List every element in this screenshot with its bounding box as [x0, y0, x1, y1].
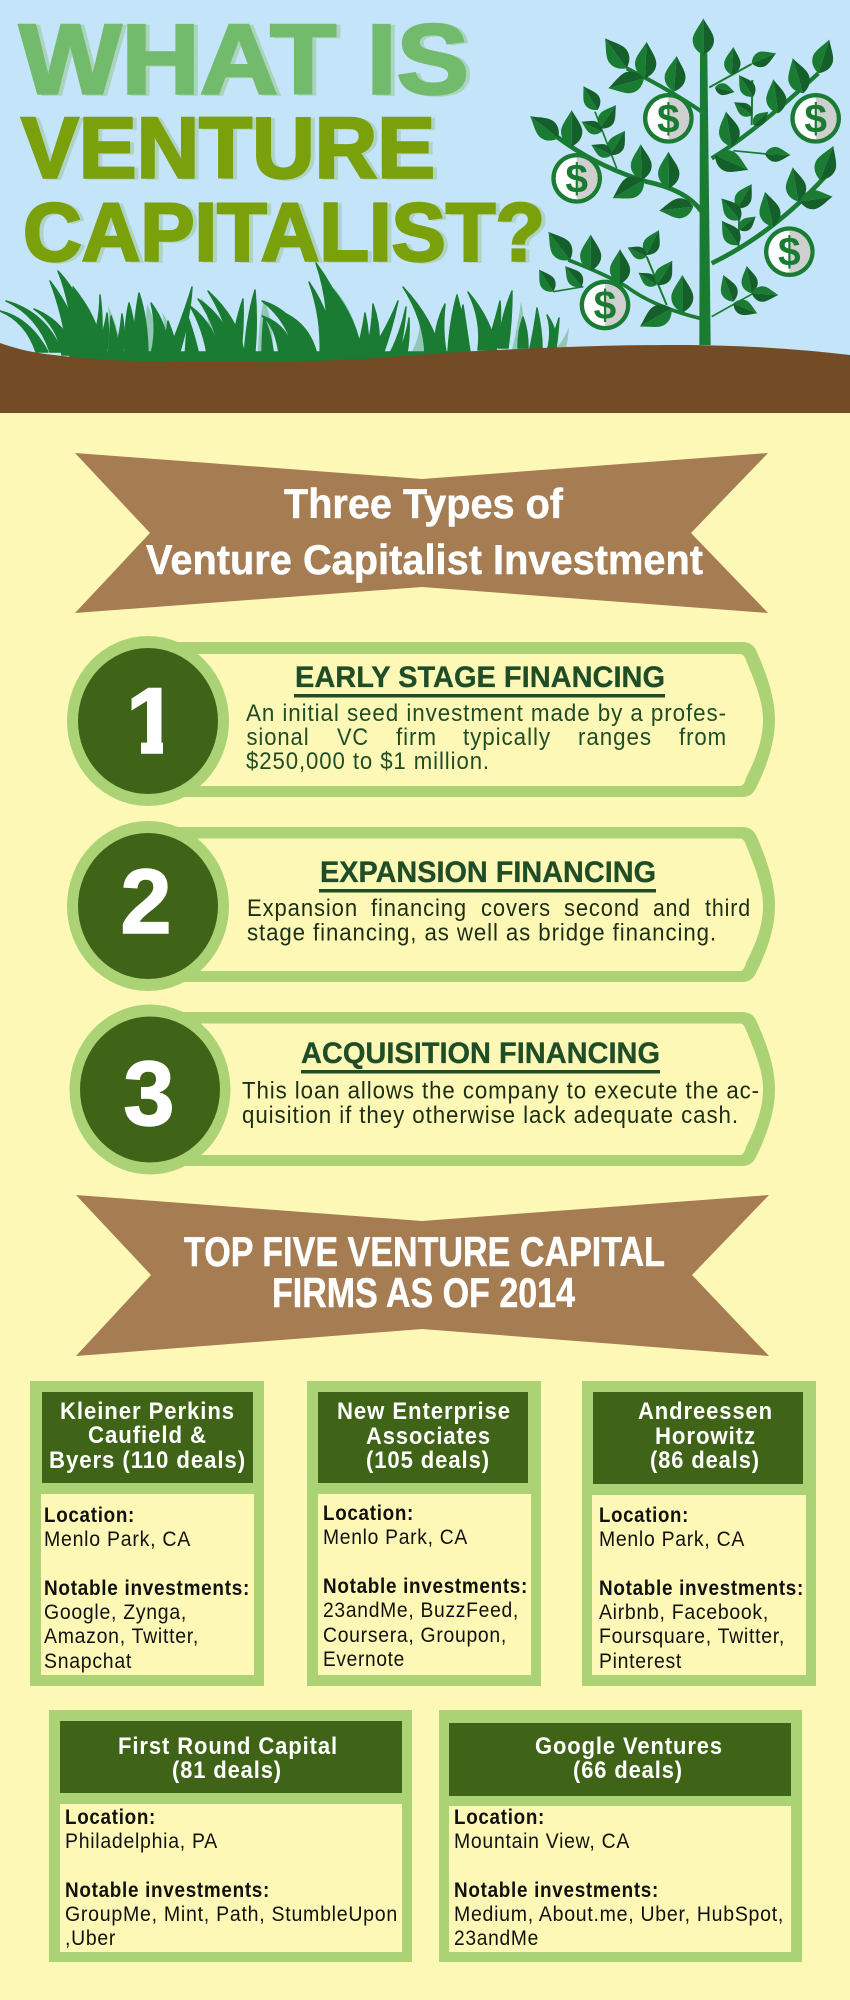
panel: early stage financing: sional — [246, 724, 310, 751]
panel: Kleiner Perkins: Caufield & — [88, 1422, 207, 1449]
panel: expansion financing: 2 — [120, 851, 172, 953]
banner: three types: Venture Capitalist Investment — [146, 536, 703, 583]
panel: Google Ventures: Mountain View, CA — [454, 1829, 630, 1853]
coin 4: $ — [778, 229, 801, 275]
panel: Google Ventures: Google Ventures — [535, 1733, 723, 1760]
panel: First Round Capital: ,Uber — [65, 1926, 116, 1950]
panel: New Enterprise Associates: New Enterprise — [337, 1398, 511, 1425]
panel: early stage financing: ranges — [578, 724, 652, 751]
panel: New Enterprise Associates: Associates — [366, 1423, 491, 1450]
panel: Kleiner Perkins: Google, Zynga, — [44, 1600, 187, 1624]
coin 1 — [643, 93, 694, 144]
panel: expansion financing: covers — [481, 895, 551, 922]
panel: early stage financing: 1 — [126, 668, 178, 773]
panel: First Round Capital: First Round Capital — [118, 1733, 338, 1760]
title: What Is Venture Capitalist?: CAPITALIST? — [27, 186, 549, 280]
panel: First Round Capital: (81 deals) — [172, 1757, 282, 1784]
panel: Kleiner Perkins: Notable investments: — [44, 1576, 250, 1600]
panel: New Enterprise Associates: Evernote — [323, 1647, 405, 1671]
panel: Google Ventures: (66 deals) — [573, 1757, 683, 1784]
banner: top five firms — [76, 1195, 769, 1356]
panel: expansion financing: Expansion — [247, 895, 358, 922]
panel: Andreessen Horowitz — [582, 1381, 816, 1686]
panel: First Round Capital — [49, 1710, 412, 1962]
panel: Kleiner Perkins: Kleiner Perkins — [60, 1398, 235, 1425]
panel: early stage financing: typically — [463, 724, 551, 751]
panel: Andreessen Horowitz: Horowitz — [655, 1423, 756, 1450]
panel: Andreessen Horowitz: Andreessen — [638, 1398, 773, 1425]
panel: Kleiner Perkins: Snapchat — [44, 1649, 132, 1673]
panel: Andreessen Horowitz: Airbnb, Facebook, — [599, 1600, 769, 1624]
panel: acquisition financing: This loan allows the company to execute the ac- — [242, 1078, 760, 1104]
panel: expansion financing: third — [705, 895, 751, 922]
coin 5 — [580, 280, 630, 330]
panel: expansion financing — [67, 821, 775, 991]
panel: Google Ventures: Location: — [454, 1805, 545, 1829]
panel: expansion financing: EXPANSION FINANCING — [320, 856, 656, 889]
panel: Kleiner Perkins: Byers (110 deals) — [49, 1447, 246, 1474]
grass — [0, 263, 569, 364]
panel: First Round Capital: Philadelphia, PA — [65, 1829, 218, 1853]
header scene: sky — [0, 0, 850, 413]
panel: expansion financing: second — [564, 895, 640, 922]
panel: Kleiner Perkins: Location: — [44, 1503, 135, 1527]
title: What Is Venture Capitalist?: VENTURE — [21, 100, 435, 196]
panel: Andreessen Horowitz: (86 deals) — [650, 1447, 760, 1474]
panel: Google Ventures: Medium, About.me, Uber, HubSpot, — [454, 1902, 784, 1926]
panel: New Enterprise Associates: Menlo Park, CA — [323, 1525, 468, 1549]
panel: Google Ventures: 23andMe — [454, 1926, 539, 1950]
coin 4 — [764, 226, 815, 277]
panel: Google Ventures: Notable investments: — [454, 1878, 659, 1902]
panel: acquisition financing: ACQUISITION FINANCING — [301, 1037, 660, 1070]
panel: New Enterprise Associates: Coursera, Groupon, — [323, 1623, 507, 1647]
panel: New Enterprise Associates: 23andMe, BuzzFeed, — [323, 1598, 519, 1622]
panel: First Round Capital: Location: — [65, 1805, 156, 1829]
panel: early stage financing: VC — [337, 724, 369, 751]
ground — [0, 343, 850, 413]
panel: New Enterprise Associates — [307, 1381, 541, 1686]
panel: Kleiner Perkins — [30, 1381, 264, 1686]
tree leaves — [524, 18, 843, 336]
panel: Andreessen Horowitz: Foursquare, Twitter, — [599, 1624, 785, 1648]
panel: New Enterprise Associates: (105 deals) — [366, 1447, 490, 1474]
panel: early stage financing: An initial seed investment made by a profes- — [246, 700, 727, 727]
tree trunk and branches — [553, 53, 825, 345]
panel: early stage financing: $250,000 to $1 million. — [246, 748, 490, 775]
panel: Andreessen Horowitz: Notable investments: — [599, 1576, 804, 1600]
panel: early stage financing: EARLY STAGE FINANCING — [295, 661, 665, 694]
panel: expansion financing: and — [653, 895, 691, 922]
banner: three types: Three Types of — [284, 480, 564, 527]
panel: acquisition financing: 3 — [123, 1043, 175, 1145]
panel: early stage financing: firm — [396, 724, 437, 751]
panel: Andreessen Horowitz: Location: — [599, 1503, 689, 1527]
coin 2: $ — [565, 155, 588, 201]
title: What Is Venture Capitalist? — [19, 4, 549, 280]
panel: acquisition financing: quisition if they otherwise lack adequate cash. — [242, 1102, 739, 1129]
panel: First Round Capital: GroupMe, Mint, Path, StumbleUpon — [65, 1902, 398, 1926]
banner: three types — [75, 453, 768, 613]
coin 3 — [790, 93, 841, 144]
title: What Is Venture Capitalist?: WHAT IS — [19, 4, 469, 114]
banner: top five firms: TOP FIVE VENTURE CAPITAL — [184, 1228, 665, 1275]
panel: Google Ventures — [439, 1710, 802, 1962]
panel: Andreessen Horowitz: Menlo Park, CA — [599, 1527, 745, 1551]
panel: New Enterprise Associates: Location: — [323, 1501, 414, 1525]
panel: First Round Capital: Notable investments: — [65, 1878, 270, 1902]
panel: early stage financing: from — [679, 724, 727, 751]
coin 5: $ — [594, 282, 617, 328]
title: What Is Venture Capitalist?: VENTURE — [25, 102, 439, 198]
banner: top five firms: FIRMS AS OF 2014 — [272, 1269, 576, 1316]
coin 2 — [551, 153, 602, 204]
coin 3: $ — [804, 95, 827, 141]
coin 1: $ — [657, 95, 680, 141]
panel: expansion financing: financing — [371, 895, 467, 922]
panel: Kleiner Perkins: Menlo Park, CA — [44, 1527, 191, 1551]
panel: expansion financing: stage financing, as well as bridge financing. — [247, 920, 717, 946]
panel: acquisition financing — [70, 1004, 775, 1174]
money tree — [524, 18, 843, 345]
title: What Is Venture Capitalist?: WHAT IS — [23, 4, 473, 116]
panel: New Enterprise Associates: Notable investments: — [323, 1574, 528, 1598]
title: What Is Venture Capitalist?: CAPITALIST? — [23, 186, 545, 278]
panel: early stage financing — [67, 636, 775, 806]
panel: Andreessen Horowitz: Pinterest — [599, 1649, 682, 1673]
panel: Kleiner Perkins: Amazon, Twitter, — [44, 1624, 199, 1648]
